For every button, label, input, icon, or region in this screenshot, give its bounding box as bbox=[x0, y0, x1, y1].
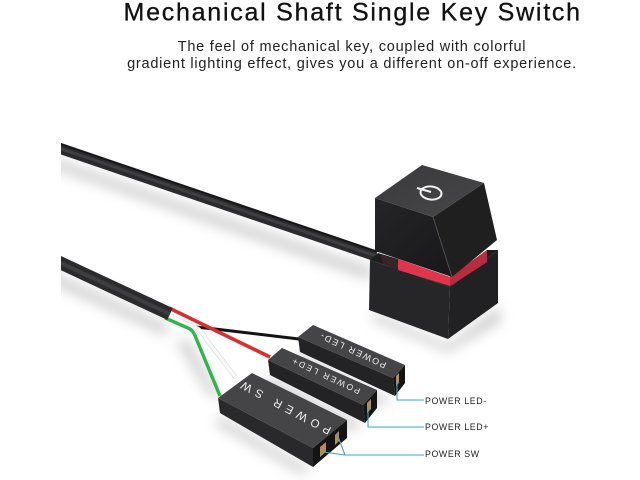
subtitle text: The feel of mechanical key, coupled with colorful bbox=[178, 39, 526, 55]
connector label: POWER LED- bbox=[317, 330, 388, 370]
keycap top face bbox=[375, 165, 484, 217]
upper cable bbox=[50, 140, 376, 256]
keycap right face bbox=[433, 183, 497, 277]
wire: black bbox=[195, 327, 299, 339]
subtitle text: gradient lighting effect, gives you a different on-off experience. bbox=[127, 56, 577, 72]
pins bbox=[320, 431, 339, 457]
callout labels: POWER LED- bbox=[425, 396, 487, 406]
connector label: POWER SW bbox=[235, 376, 333, 436]
wire: red bbox=[169, 308, 270, 357]
pin bbox=[396, 373, 399, 386]
callout labels bbox=[425, 396, 489, 459]
cable sheath bbox=[50, 258, 170, 314]
wire: white bbox=[166, 314, 236, 378]
subtitle text bbox=[127, 39, 577, 72]
red light band bbox=[398, 250, 487, 286]
wire: green bbox=[165, 318, 220, 396]
connector: POWER SW bbox=[218, 373, 347, 467]
icon: power symbol bbox=[417, 185, 442, 201]
key switch bbox=[369, 165, 500, 352]
callout labels: POWER SW bbox=[425, 449, 480, 459]
connector: POWER LED- bbox=[298, 325, 405, 396]
callout labels: POWER LED+ bbox=[425, 422, 489, 432]
lower cable with wires bbox=[50, 258, 299, 396]
keycap front face bbox=[375, 198, 452, 277]
callout lines bbox=[323, 382, 424, 455]
connector label: POWER LED+ bbox=[289, 355, 362, 396]
base bbox=[369, 260, 450, 339]
soft shadows bbox=[50, 156, 392, 474]
connector: POWER LED+ bbox=[268, 348, 377, 423]
pin bbox=[367, 399, 371, 413]
base shadow bbox=[372, 306, 500, 352]
